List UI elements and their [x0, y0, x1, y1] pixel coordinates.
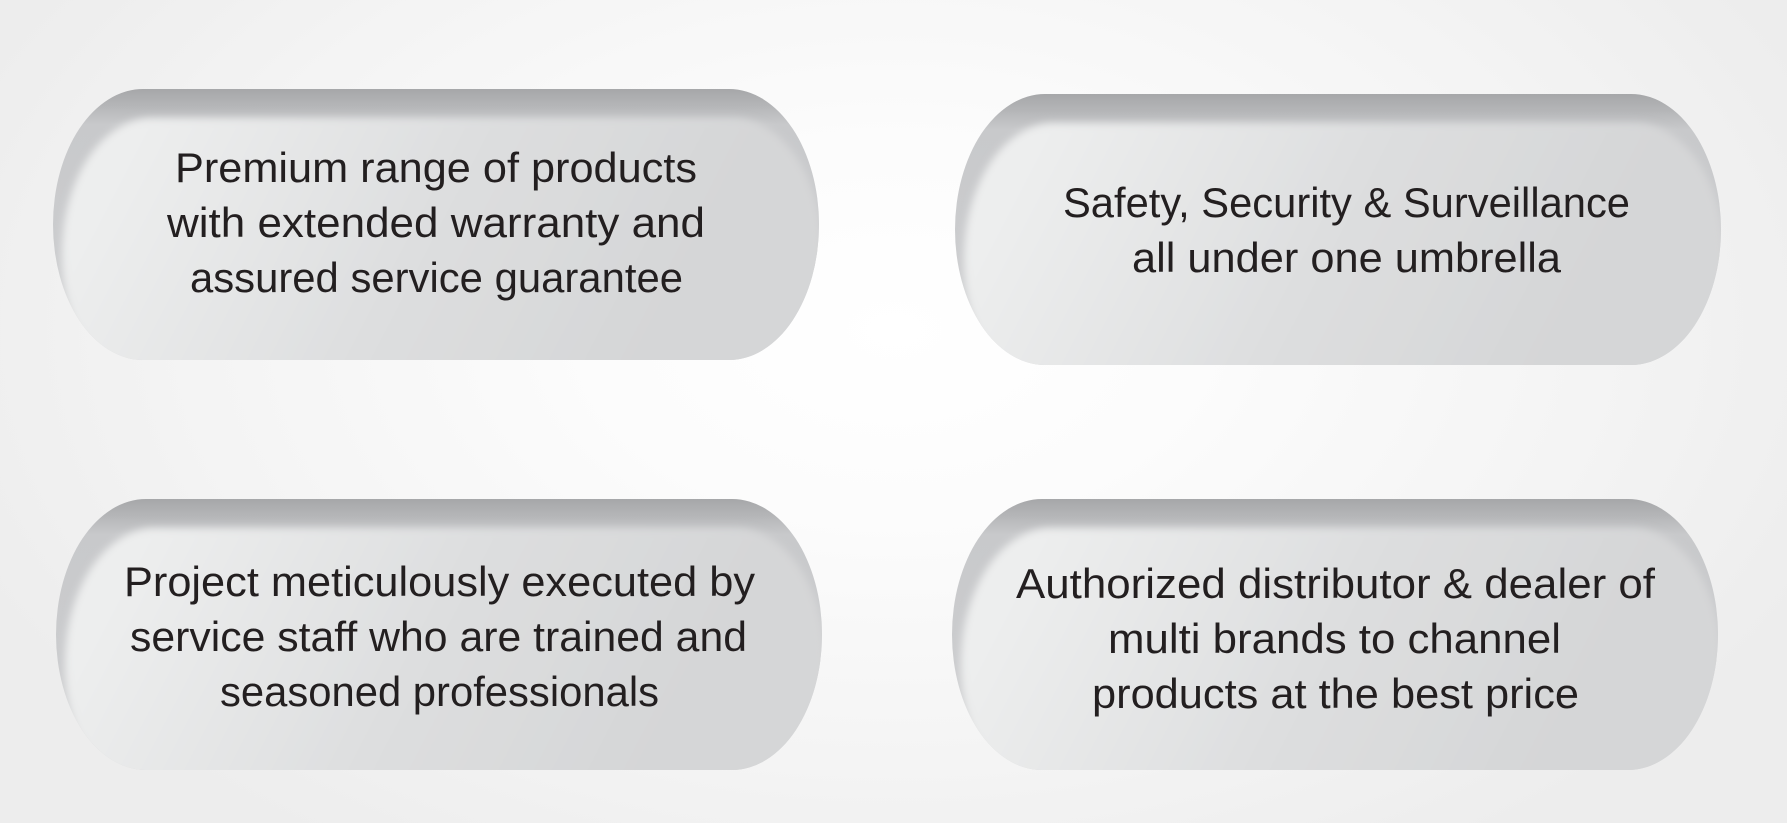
panel: project execution: [56, 499, 822, 770]
pill text: Project meticulously executed by: [124, 558, 755, 605]
pill text: seasoned professionals: [220, 668, 659, 715]
panel: premium range of products: [53, 89, 819, 360]
pill shape: [952, 499, 1718, 770]
pill text: [166, 144, 705, 301]
panel: safety security surveillance: [955, 94, 1721, 365]
pill text: Safety, Security & Surveillance: [1063, 179, 1630, 226]
pill text: service staff who are trained and: [130, 613, 747, 660]
pill text: assured service guarantee: [190, 254, 683, 301]
pill text: products at the best price: [1092, 670, 1579, 717]
pill text: [1063, 179, 1630, 281]
pill text: Premium range of products: [175, 144, 697, 191]
pill text: [1016, 560, 1655, 717]
pill text: multi brands to channel: [1108, 615, 1561, 662]
pill shape: [56, 499, 822, 770]
pill text: all under one umbrella: [1132, 234, 1562, 281]
pill text: Authorized distributor & dealer of: [1016, 560, 1655, 607]
pill text: with extended warranty and: [166, 199, 705, 246]
pill text: [124, 558, 755, 715]
pill shape: [53, 89, 819, 360]
pill shape: [955, 94, 1721, 365]
panel: authorized distributor: [952, 499, 1718, 770]
